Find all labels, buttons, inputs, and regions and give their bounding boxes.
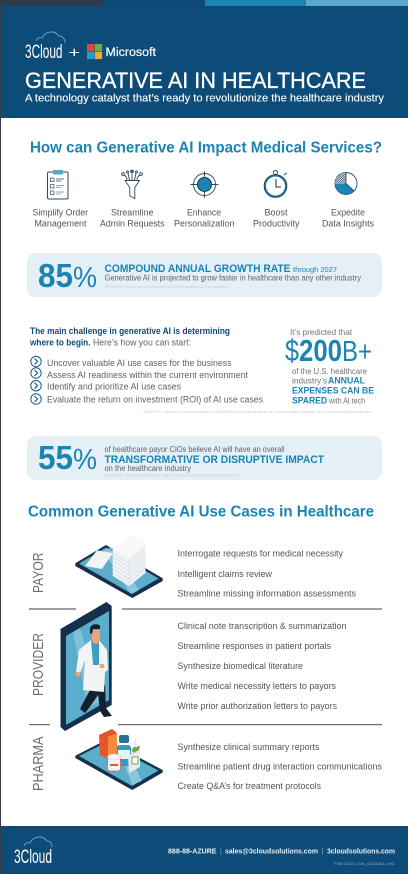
section label: provider: PROVIDER [31,633,47,696]
text block: main challenge: Here’s how you can start: [93,338,191,348]
stat: $200B+ savings: industry’s [292,376,327,386]
plus sign: + [68,44,80,62]
label: simplify order management: Management [34,218,87,228]
medicine box [99,729,117,761]
label: enhance personalization: Enhance [187,208,221,218]
label: expedite data insights: Data Insights [322,218,374,228]
list: how to start: Identify and prioritize AI use cases [47,382,182,392]
stat: $200B+ savings [285,327,374,406]
text block: main challenge [29,326,230,348]
heading: medical services: How can Generative AI Impact Medical Services? [30,140,382,156]
text block: main challenge: where to begin. [29,338,90,348]
stat: $200B+ savings: B+ [342,336,372,368]
label: boost productivity: Productivity [253,218,300,228]
header banner [0,0,408,118]
stat: 85% [38,257,97,294]
stat description: on the healthcare industry [104,464,191,473]
paper stack [113,535,146,586]
use cases: provider: Write prior authorization letters to payors [178,701,337,711]
contact details [168,848,395,856]
stat description: Generative AI is projected to grow faster in healthcare than any other industry [104,274,361,282]
title: GENERATIVE AI IN HEALTHCARE [25,68,366,93]
list: how to start: Evaluate the return on investment (ROI) of AI use cases [47,394,264,404]
stat: $200B+ savings: SPARED [292,396,327,406]
source: SOURCE: forbes.com/sites/bdlifted/2023/08/01/how-generative-ai-a-technology-catalyst-is-revolutionizing-healthcare [143,410,372,414]
use cases: payor: Intelligent claims review [178,569,272,579]
icon: pie chart [335,172,357,194]
stat: 85%: % [73,262,97,294]
stat heading: through 2027 [293,265,337,274]
use cases: pharma: Streamline patient drug interaction communications [178,762,382,772]
list: how to start: Assess AI readiness within the current environment [47,370,249,380]
stat: $200B+ savings: of the U.S. healthcare [292,366,367,376]
stat description [104,445,324,473]
heading: use cases: Common Generative AI Use Cases in Healthcare [28,504,374,520]
logo: 3Cloud: 3Cloud [25,42,62,63]
label: enhance personalization: Personalization [174,218,234,228]
panel: 85% growth stat [27,253,382,297]
label: expedite data insights: Expedite [331,208,365,218]
label: boost productivity [253,208,300,228]
label: expedite data insights [322,208,374,228]
logo: Microsoft [87,44,157,59]
dropper bottle [128,738,140,773]
paper sheet [85,550,113,569]
use cases: payor: Interrogate requests for medical necessity [178,548,343,558]
section label: payor: PAYOR [31,552,47,593]
source: SOURCE: bcg.com/publications/2023/generative-ai-in-medtech [105,285,227,289]
use cases: provider: Streamline responses in patient portals [178,641,331,651]
contact details: | [322,848,324,856]
stat: 55%: 55 [38,439,73,476]
footer logo [14,837,52,868]
document code: FEB 2024 | DA_0224201_MC [334,862,396,866]
stat: 85%: 85 [38,257,73,294]
doctor [76,624,112,717]
icon: target [190,171,218,198]
subtitle: A technology catalyst that’s ready to revolutionize the healthcare industry [25,92,385,104]
use cases: provider: Write medical necessity letters to payors [178,681,336,691]
label: streamline admin requests: Streamline [111,208,154,218]
stat description: TRANSFORMATIVE OR DISRUPTIVE IMPACT [104,454,324,466]
white jar [108,754,120,771]
contact details: | [220,848,222,856]
stat: $200B+ savings: ANNUAL [328,376,365,386]
contact details: 3cloudsolutions.com [327,848,395,856]
panel: 55% impact stat [27,436,382,480]
logo: Microsoft: Microsoft [106,47,157,59]
label: simplify order management: Simplify Order [32,208,88,218]
contact details: sales@3cloudsolutions.com [225,848,318,856]
use cases: provider: Synthesize biomedical literature [178,661,303,671]
label: streamline admin requests: Admin Requests [100,218,165,228]
stat: $200B+ savings: $ [285,333,299,368]
list: how to start [31,356,264,404]
use cases: provider: Clinical note transcription & summarization [178,621,346,631]
icon: funnel [122,170,142,198]
stat: $200B+ savings: with AI tech [328,396,365,406]
stat: $200B+ savings: 200 [299,333,342,368]
use cases: pharma: Synthesize clinical summary reports [178,742,320,752]
section label: pharma: PHARMA [31,736,47,791]
use cases: pharma [178,742,382,791]
label: enhance personalization [174,208,234,228]
list: how to start: Uncover valuable AI use cases for the business [47,358,232,368]
logo: 3Cloud [25,32,65,63]
stat: $200B+ savings: It’s predicted that [290,327,353,337]
label: simplify order management [32,208,88,228]
stat heading: COMPOUND ANNUAL GROWTH RATE [104,263,290,275]
illustration: tablet with medicine [75,729,163,790]
use cases: pharma: Create Q&A’s for treatment protocols [178,781,321,791]
label: streamline admin requests [100,208,165,228]
label: boost productivity: Boost [264,208,288,218]
text block: main challenge: The main challenge in generative AI is determining [30,326,230,336]
blue bottle [117,735,131,766]
footer [0,826,408,874]
contact details: 888-88-AZURE [168,848,217,856]
source: SOURCE: Gartner Healthcare Payer Research Panel Survey, May 2023 [105,474,238,478]
use cases: payor [178,548,356,598]
use cases: payor: Streamline missing information assessments [178,588,356,598]
icon: stopwatch [264,170,287,198]
stat: 55%: % [73,444,97,476]
illustration: phone with doctor [60,602,112,731]
use cases: provider [178,621,346,711]
illustration: tablet with paper stack [75,535,163,598]
footer logo: 3Cloud [14,847,52,868]
stat: 55% [38,439,97,476]
stat description: of healthcare payor CIOs believe AI will have an overall [104,445,285,454]
icon: clipboard [48,170,68,199]
stat: $200B+ savings: EXPENSES CAN BE [292,386,374,396]
